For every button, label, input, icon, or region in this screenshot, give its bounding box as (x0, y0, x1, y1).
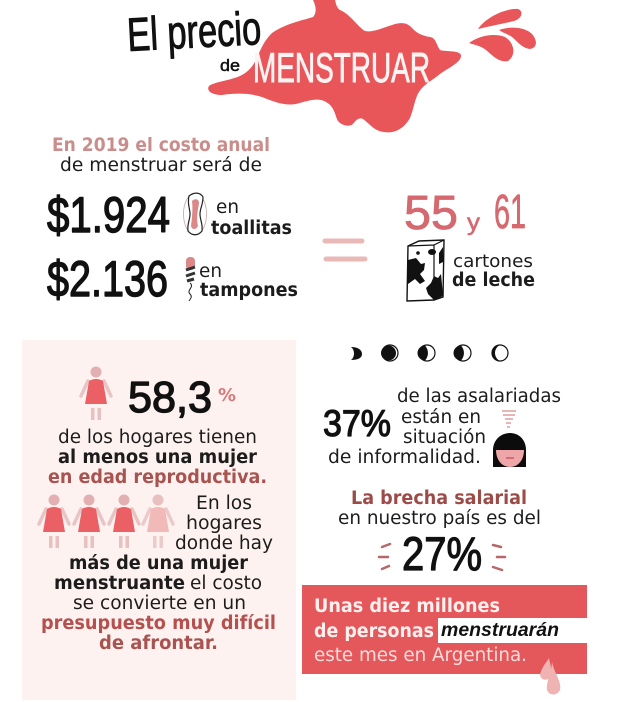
text: de las asalariadas: de las asalariadas (397, 386, 561, 407)
callout text: este mes en Argentina. (314, 645, 527, 666)
number: 1.924: $1.924 (47, 187, 170, 243)
text: multiple women households: de afrontar. (99, 633, 218, 654)
heading: annual cost: En 2019 el costo anual (52, 134, 270, 156)
icon: thought swirl (502, 411, 516, 427)
icon: drops (469, 9, 536, 61)
number: 55 y 61 (404, 186, 526, 240)
text: en tampones: en (199, 260, 222, 282)
text: multiple women households: hogares (186, 513, 262, 534)
text: multiple women households: más de una mujer (69, 553, 249, 574)
text: cartones de leche: de leche (452, 270, 535, 291)
section: wage gap (338, 488, 541, 580)
text: households share: de los hogares tienen (58, 427, 257, 448)
icon: tampon (186, 257, 195, 301)
text: households share: al menos una mujer (58, 447, 258, 468)
icon: moon phases (351, 345, 508, 361)
text: multiple women households: donde hay (175, 533, 273, 554)
percent sign: % (218, 385, 236, 406)
section: annual cost (47, 134, 298, 307)
text: multiple women households (41, 493, 276, 654)
text: multiple women households: presupuesto muy difícil (41, 613, 276, 634)
text: households share: en edad reproductiva. (48, 467, 267, 488)
panel: households (22, 340, 296, 700)
text: informal situation: están en (401, 407, 481, 428)
text: informal situation: situación (403, 427, 486, 448)
callout: ten million people (302, 585, 587, 694)
icon: pad (184, 193, 206, 235)
text: households share (48, 427, 267, 488)
text: multiple women households: el costo (190, 573, 262, 594)
text: en toallitas: toallitas (211, 218, 292, 239)
icon: drops (540, 658, 560, 694)
callout text (314, 596, 559, 666)
callout background (302, 585, 587, 674)
title block (126, 0, 536, 132)
icon: milk carton (407, 240, 444, 301)
text: multiple women households: En los (196, 493, 252, 514)
number: 2.136: $2.136 (47, 251, 168, 307)
text: multiple women households: menstruante (54, 573, 185, 594)
text: en nuestro pais: en nuestro país es del (338, 508, 541, 529)
icon: four women (39, 494, 173, 548)
text: cartones de leche (452, 251, 535, 291)
text: informal situation: de informalidad. (328, 447, 481, 468)
number: 55 y 61: y (467, 209, 481, 235)
section: milk cartons (404, 186, 535, 301)
number: 55 y 61: 61 (494, 186, 526, 239)
heading: MENSTRUAR: MENSTRUAR (253, 44, 430, 91)
icon: left dashes (379, 544, 390, 569)
number: 55 y 61: 55 (404, 187, 458, 240)
text: cartones de leche: cartones (453, 251, 533, 272)
heading: de: de (220, 56, 240, 75)
callout text: menstruarán (441, 620, 559, 641)
text: en toallitas: en (216, 196, 239, 218)
heading: El precio: El precio (126, 1, 262, 61)
text: en tampones: tampones (200, 280, 298, 301)
number: 27%: 27% (402, 527, 482, 580)
section: informal work (323, 386, 561, 468)
callout text: de personas (314, 621, 434, 642)
text: multiple women households: se convierte en un (73, 593, 246, 614)
heading: wage gap: La brecha salarial (351, 488, 527, 509)
text: en tampones (199, 260, 298, 301)
number: 37%: 37% (323, 403, 391, 444)
icon: right dashes (493, 545, 505, 570)
text: en toallitas (211, 196, 292, 239)
icon: blood stain (208, 0, 461, 132)
icon: woman (81, 366, 111, 420)
text: informal situation (328, 407, 486, 468)
icon: face with black hair (493, 433, 526, 467)
icon: equals sign (325, 241, 365, 259)
highlight strip (438, 618, 587, 643)
callout text: Unas diez millones (314, 596, 500, 617)
number: 58,3: 58,3 (128, 373, 212, 422)
panel background (22, 340, 296, 700)
text: de menstruar: de menstruar será de (60, 155, 262, 176)
